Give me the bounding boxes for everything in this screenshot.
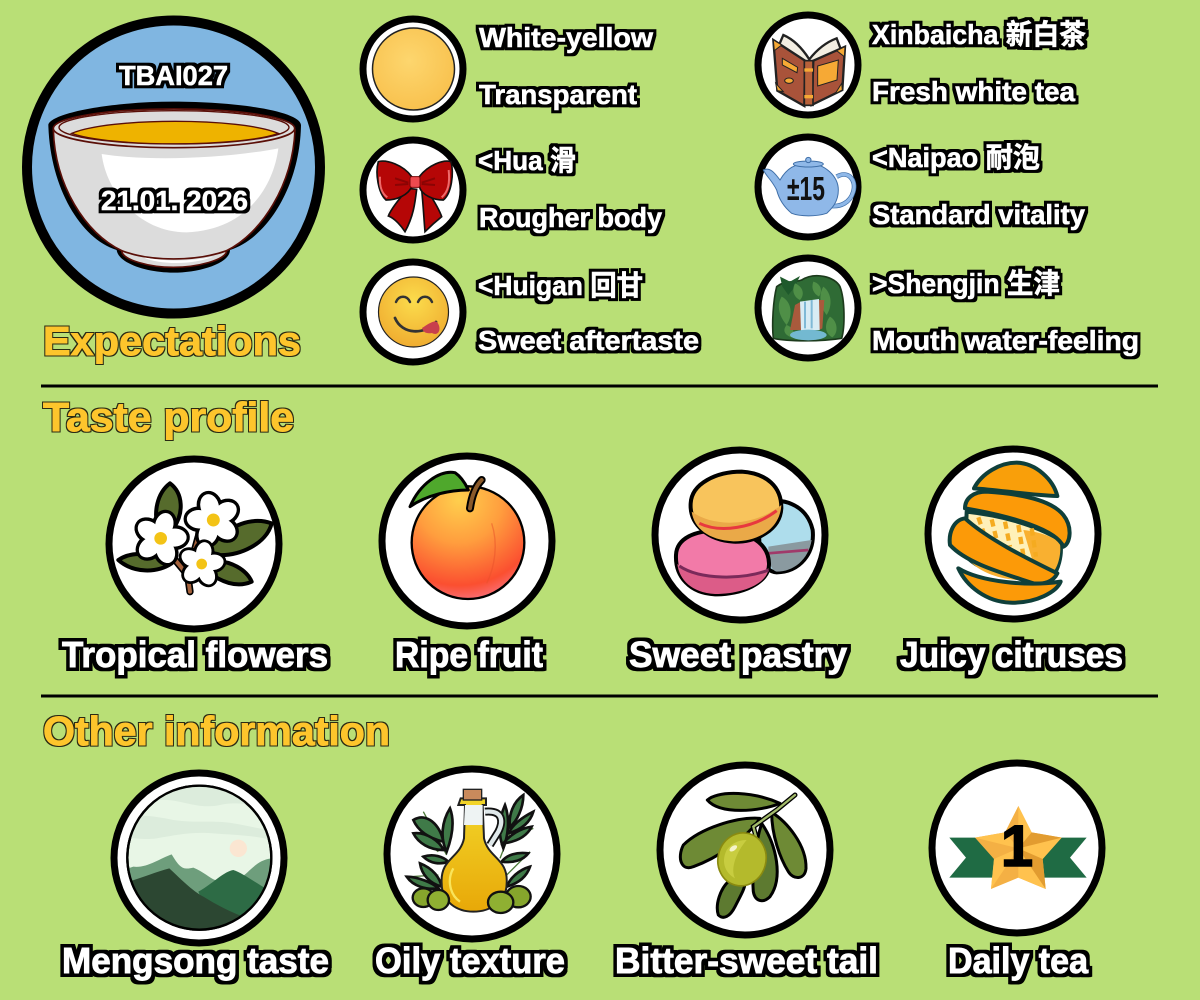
label: Daily tea xyxy=(948,940,1089,981)
other: bitter-sweet tail xyxy=(615,765,878,981)
icon: olive oil jug xyxy=(407,789,533,913)
other: mengsong taste xyxy=(62,773,329,981)
label: Bitter-sweet tail xyxy=(615,940,878,981)
heading: Taste profile: Taste profile xyxy=(43,394,294,440)
text: hua: <Hua 滑 xyxy=(478,145,576,176)
expectation: colour xyxy=(363,19,653,119)
expectation: xinbaicha xyxy=(758,15,1086,115)
icon: red bow xyxy=(377,161,452,232)
tea bowl badge xyxy=(27,20,320,314)
icon: peeled orange xyxy=(950,463,1070,603)
star number: 1 xyxy=(1001,814,1033,879)
icon: ranked star xyxy=(949,806,1087,889)
icon: mountain landscape xyxy=(123,785,277,935)
icon: flowers xyxy=(118,483,272,592)
label: Juicy citruses xyxy=(900,634,1123,675)
text: mouth feel: Mouth water-feeling xyxy=(872,325,1139,356)
text: type: Fresh white tea xyxy=(872,76,1075,107)
text: huigan: <Huigan 回甘 xyxy=(478,270,643,301)
expectation: naipao xyxy=(758,137,1085,237)
text: name: Xinbaicha 新白茶 xyxy=(872,19,1086,50)
text: aftertaste: Sweet aftertaste xyxy=(478,325,699,356)
label: Ripe fruit xyxy=(395,634,543,675)
text: vitality: Standard vitality xyxy=(872,199,1085,230)
icon: smiling face xyxy=(378,277,448,347)
text: clarity: Transparent xyxy=(479,79,637,110)
taste: ripe fruit xyxy=(382,456,552,675)
icon: peach xyxy=(410,472,524,599)
teapot number: ±15 xyxy=(787,170,825,207)
icon: teapot xyxy=(763,157,854,216)
label: Tropical flowers xyxy=(62,634,328,675)
other: oily texture xyxy=(375,769,565,981)
label: Oily texture xyxy=(375,940,565,981)
expectation: huigan xyxy=(363,262,699,362)
expectation: hua xyxy=(363,140,662,240)
other: daily tea xyxy=(932,763,1102,981)
label: Sweet pastry xyxy=(629,634,847,675)
heading: Expectations: Expectations xyxy=(43,318,301,364)
heading: Other information: Other information xyxy=(43,708,390,754)
date: 21.01. 2026 xyxy=(101,185,248,216)
icon: open book xyxy=(773,35,845,106)
tea code: TBAI027 xyxy=(119,60,228,91)
text: body: Rougher body xyxy=(479,202,662,233)
icon: olive branch xyxy=(680,793,806,917)
icon: tea bowl xyxy=(48,102,301,273)
icon: macarons xyxy=(676,472,813,594)
text: naipao: <Naipao 耐泡 xyxy=(872,142,1040,173)
text: colour: White-yellow xyxy=(479,22,653,53)
label: Mengsong taste xyxy=(62,940,329,981)
expectation: shengjin xyxy=(758,258,1139,358)
taste: juicy citruses xyxy=(900,449,1123,675)
taste: tropical flowers xyxy=(62,459,328,675)
taste: sweet pastry xyxy=(629,450,847,675)
text: shengjin: >Shengjin 生津 xyxy=(872,268,1060,299)
icon: waterfall xyxy=(773,276,844,341)
